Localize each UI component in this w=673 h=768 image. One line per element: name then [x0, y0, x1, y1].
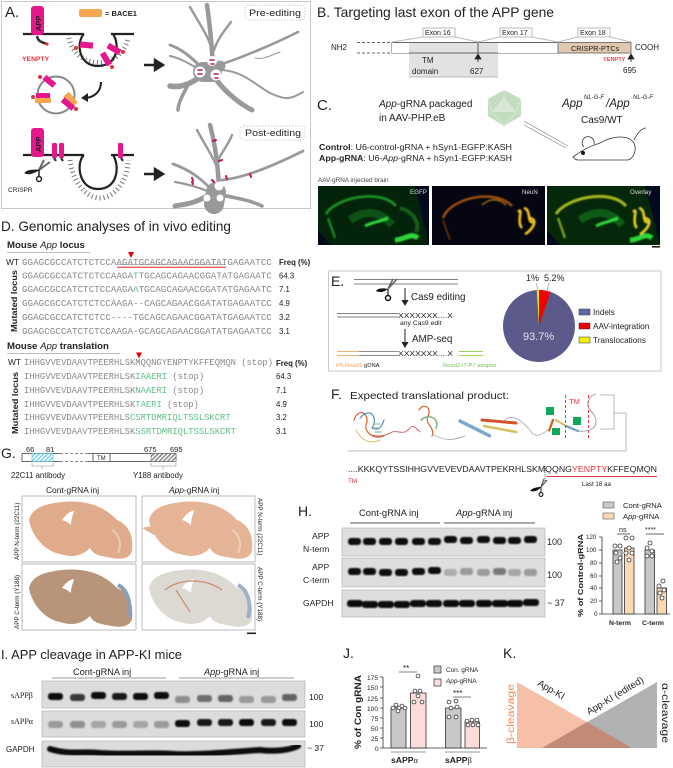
- blot headings: [350, 507, 535, 523]
- APP cylinder bottom with truncated APP: APP: [34, 137, 43, 152]
- legend J: App-gRNA: [445, 678, 477, 685]
- curved arrow: [81, 82, 101, 102]
- mutated translation rows: 4.9: [276, 400, 287, 409]
- legend J: Con. gRNA: [446, 667, 479, 674]
- row labels: [14, 498, 263, 629]
- row labels: APP C-term (Y188): [14, 575, 21, 629]
- blot row labels: ~ 37: [547, 598, 565, 608]
- gene bar labels: YENPTY: [603, 57, 626, 63]
- mutated locus rows: Mutated locus: [10, 269, 19, 332]
- scale bar: [652, 246, 660, 248]
- gene bar labels: CRISPR-PTCs: [571, 44, 620, 53]
- title F: F.: [331, 386, 342, 402]
- blot: GAPDH I: [42, 741, 305, 767]
- title D: D. Genomic analyses of in vivo editing: [1, 218, 231, 234]
- TM region: TM: [569, 397, 580, 406]
- blot headings: Cont-gRNA inj: [359, 507, 418, 518]
- row labels I: sAPPβ: [11, 691, 33, 700]
- mutated locus rows: 3.1: [279, 327, 290, 336]
- mutated locus rows: 64.3: [279, 272, 294, 280]
- icon: scissors cut site: [530, 466, 547, 496]
- gene bar labels: domain: [412, 67, 438, 76]
- workflow diagram: P5-Read1-gDNA: [336, 363, 380, 369]
- panel E: AMP-seq and pie: [328, 271, 661, 371]
- significance J: **: [403, 664, 409, 673]
- axis H: 120: [586, 534, 597, 541]
- panel C: experimental design: [317, 90, 660, 248]
- APP schematic: Y188 antibody: [133, 471, 183, 480]
- image: EGFP brain: EGFP: [410, 189, 427, 196]
- mutated translation rows: [11, 371, 291, 437]
- label: post-editing: Post-editing: [245, 128, 301, 138]
- pie chart: 1%: [526, 273, 539, 283]
- x labels J: [391, 752, 480, 765]
- axis J: [353, 674, 487, 753]
- WT translation row: Freq (%): [276, 359, 308, 368]
- pie legend: AAV-integration: [593, 322, 650, 331]
- genotype: NL-G-F: [633, 95, 653, 101]
- pie legend: Indels: [593, 308, 615, 317]
- mutated translation rows: IHHGVVEVDAAVTPEERHLSKSSRTDMRIQLTSSLSKCRT: [24, 427, 236, 437]
- APP molecules in pit: [74, 41, 125, 69]
- exon labels: Exon 18: [580, 30, 606, 37]
- pie legend: Translocations: [593, 336, 646, 345]
- mutated locus rows: [10, 269, 294, 337]
- gene bar labels: 627: [470, 67, 484, 76]
- axis H: [576, 533, 670, 618]
- image: EGFP brain: [318, 186, 429, 245]
- icon: mouse: [573, 128, 646, 160]
- pie chart: [503, 273, 575, 362]
- label E: E.: [331, 273, 344, 289]
- WT locus row: Freq (%): [279, 258, 311, 267]
- exon labels: Exon 17: [502, 30, 528, 37]
- blot row labels: C-term: [303, 575, 329, 585]
- image: NeuN brain: [432, 186, 545, 245]
- pie chart: 5.2%: [544, 273, 565, 283]
- label H: H.: [298, 503, 312, 519]
- mutated locus rows: 4.9: [279, 299, 290, 308]
- gene bar labels: COOH: [635, 43, 659, 52]
- axis J: 100: [367, 706, 378, 713]
- gene bar labels: TM: [422, 56, 434, 65]
- genotype: /App: [605, 98, 630, 110]
- workflow diagram: Cas9 editing: [411, 292, 465, 303]
- mutated translation rows: IHHGVVEVDAAVTPEERHLSCSRTDMRIQLTSSLSKCRT: [24, 413, 231, 423]
- bars H: [613, 548, 666, 614]
- panel H: western blot and bar chart: [298, 501, 670, 627]
- x labels J: sAPPβ: [445, 755, 472, 765]
- APP schematic: 695: [170, 445, 183, 454]
- label: pre-editing: Pre-editing: [249, 8, 301, 18]
- bar chart H: [576, 501, 670, 627]
- histology: App N-term: [142, 496, 255, 562]
- data points J: [391, 674, 480, 727]
- label J: J.: [343, 645, 354, 661]
- genotype: App: [561, 98, 583, 110]
- mutated translation rows: 3.1: [276, 427, 287, 436]
- label: CRISPR: CRISPR: [8, 187, 33, 194]
- gene bar labels: [331, 43, 659, 76]
- row labels: APP N-term (22C11): [256, 498, 263, 556]
- membrane with pit top: [23, 34, 134, 66]
- mutated translation rows: Mutated locus: [11, 371, 20, 434]
- mutated translation rows: 3.2: [276, 413, 287, 422]
- legend H: Cont-gRNA: [623, 501, 663, 510]
- AAV text: [378, 99, 472, 124]
- APP cylinder top: APP: [34, 16, 43, 31]
- amino acid sequence: TM: [348, 478, 357, 485]
- histology: control N-term: [22, 496, 136, 562]
- mutated locus rows: GGAGCGCCATCTCTCC----TGCAGCAGAACGGATATGAGAATCC: [22, 312, 272, 323]
- axis J: 125: [367, 696, 378, 703]
- label G: G.: [1, 445, 16, 461]
- significance J: ***: [453, 689, 462, 698]
- mutated translation rows: IHHGVVEVDAAVTPEERHLSKTAERI (stop): [24, 400, 199, 410]
- axis H: 0: [594, 611, 598, 618]
- axis J: 50: [371, 726, 379, 733]
- row labels I: sAPPα: [11, 717, 34, 726]
- histology: control C-term: [22, 564, 136, 630]
- row labels I: [6, 691, 324, 754]
- x labels J: sAPPα: [391, 755, 418, 765]
- significance H: ns: [619, 525, 627, 534]
- column headings: App-gRNA inj: [168, 485, 219, 495]
- mutated translation rows: 64.3: [276, 372, 291, 381]
- row labels: APP C-term (Y188): [256, 567, 263, 621]
- blot: sAPPalpha: [42, 711, 305, 737]
- construct text: App-gRNA : U6- App-gRNA + hSyn1-EGFP:KASH: [319, 154, 512, 163]
- workflow diagram: [336, 279, 497, 369]
- WT locus row: WT: [6, 257, 19, 267]
- clathrin coat top: [69, 38, 128, 63]
- label: post-editing: [240, 126, 305, 140]
- mutated locus rows: GGAGCGCCATCTCTCCAAGATTGCAGCAGAACGGATATGAGAATC: [22, 270, 272, 282]
- genotype: NL-G-F: [584, 95, 604, 101]
- mutated locus rows: 7.1: [279, 285, 290, 294]
- APP schematic: [11, 445, 183, 480]
- heading: translation: Mouse App translation: [7, 341, 109, 352]
- blot row labels: GAPDH: [303, 598, 334, 608]
- panel D: genomic analyses: [1, 218, 311, 437]
- blot row labels: [303, 531, 565, 608]
- row labels I: ~ 37: [307, 743, 324, 753]
- WT locus row: GGAGCGCCATCTCTCCAAGATGCAGCAGAACGGATATGAGAATCC: [22, 257, 272, 268]
- APP schematic: 81: [46, 445, 54, 454]
- APP schematic: 675: [144, 445, 157, 454]
- label: pre-editing: [245, 5, 305, 20]
- secretase tags: [546, 407, 581, 435]
- axis H: 80: [590, 560, 597, 567]
- icon: AAV capsid: [488, 90, 521, 126]
- image: overlay brain: [547, 186, 660, 245]
- arrow bottom: [144, 169, 163, 179]
- mutated locus rows: GGAGCGCCATCTCTCCAAGA--CAGCAGAACGGATATGAGAATCC: [22, 298, 272, 309]
- axis H: 20: [590, 598, 597, 605]
- APP cylinder top: [31, 6, 49, 46]
- blot headings I: [52, 667, 294, 678]
- genotype: [561, 95, 653, 126]
- blot: N-term: [342, 528, 545, 556]
- arrow top: [144, 60, 163, 70]
- mutated translation rows: 7.1: [276, 386, 287, 395]
- x labels H: C-term: [642, 620, 664, 627]
- blot: C-term: [342, 558, 545, 587]
- image: NeuN brain: NeuN: [522, 189, 538, 196]
- column headings: [46, 485, 219, 495]
- label C: C.: [317, 97, 332, 114]
- blot row labels: APP: [312, 562, 329, 572]
- cut marker translation: [136, 352, 142, 358]
- panel J: bar chart: [343, 645, 487, 765]
- axis H: 60: [590, 573, 597, 580]
- caption: AAV-gRNA injected brain: [318, 177, 389, 184]
- triangle: alpha: [542, 682, 657, 748]
- construct text: Control : U6-control-gRNA + hSyn1-EGFP:KASH: [319, 143, 512, 152]
- workflow diagram: XXXXXXX....X: [398, 311, 453, 320]
- bars J: [391, 693, 480, 748]
- label beta cleavage: β-cleavage: [506, 684, 517, 744]
- workflow diagram: AMP-seq: [412, 334, 452, 345]
- panel A: APP endocytosis and editing: [2, 2, 310, 208]
- bracket lines: [348, 395, 626, 451]
- legend H: [603, 501, 663, 521]
- axis J: 75: [371, 716, 379, 723]
- vesicle with APP and BACE1: [31, 75, 78, 114]
- blot headings: App-gRNA inj: [455, 507, 512, 518]
- blot row labels: 100: [547, 570, 562, 580]
- blot row labels: N-term: [303, 544, 329, 554]
- axis J: 150: [367, 685, 378, 692]
- blot row labels: 100: [547, 537, 562, 547]
- pie chart: 93.7%: [523, 331, 554, 343]
- subtitle F: Expected translational product:: [350, 391, 509, 402]
- clathrin coat bottom: [70, 160, 128, 198]
- workflow diagram: XXXXXXX....X: [398, 349, 453, 358]
- label App-KI edited: App-KI (edited): [585, 675, 646, 718]
- protein structure ribbons: [354, 406, 578, 442]
- exon connectors: [392, 37, 631, 77]
- gene bar labels: NH2: [331, 43, 348, 52]
- mutated locus rows: GGAGCGCCATCTCTCCAAGAATGCAGCAGAACGGATATGAGAATC: [22, 284, 272, 295]
- row labels I: GAPDH: [6, 745, 35, 754]
- significance H: ****: [645, 527, 656, 534]
- histology: App C-term: [142, 564, 255, 630]
- mutated locus rows: 3.2: [279, 313, 290, 322]
- x labels H: N-term: [609, 620, 631, 627]
- x labels H: [609, 620, 664, 627]
- mutated locus rows: GGAGCGCCATCTCTCCAAGA-GCAGCAGAACGGATATGAGAATCC: [22, 326, 272, 337]
- label App-KI: App-KI: [536, 678, 566, 702]
- significance H: [617, 525, 664, 534]
- triangle: beta: [517, 682, 632, 748]
- image: overlay brain: Overlay: [630, 189, 652, 196]
- APP cylinder bottom with truncated APP: [31, 128, 123, 161]
- neuron pre-editing: [170, 5, 303, 110]
- membrane with pit bottom: [23, 155, 134, 189]
- triangle overlap: [542, 722, 632, 748]
- amino acid sequence: ....KKKQYTSSIHHGVVEVEVDAAVTPEKRHLSKMQQNG YENPTYKFFEQMQN: [348, 464, 657, 474]
- amino acid sequence: [348, 464, 657, 488]
- legend H: App-gRNA: [623, 512, 660, 521]
- workflow diagram: any Cas9 edit: [400, 320, 442, 327]
- exon labels: [423, 28, 610, 37]
- axis H: % of Control-gRNA: [576, 533, 585, 617]
- WT translation row: IHHGVVEVDAAVTPEERHLSKMQQNGYENPTYKFFEQMQN (stop): [24, 358, 273, 368]
- column headings: Cont-gRNA inj: [46, 485, 99, 495]
- BACE1 legend: [79, 9, 137, 18]
- neuron post-editing: [173, 125, 303, 206]
- TM region: [566, 394, 596, 440]
- APP schematic: 66: [26, 445, 34, 454]
- data points H: [613, 536, 666, 600]
- APP schematic: TM: [97, 456, 106, 462]
- cut marker locus: [128, 252, 134, 258]
- panel I: APP cleavage: [1, 647, 324, 767]
- legend J: [434, 666, 479, 686]
- label alpha cleavage: α-cleavage: [659, 683, 670, 743]
- panel A label: A.: [5, 4, 19, 21]
- blot row labels: APP: [312, 531, 329, 541]
- BACE1 legend: = BACE1: [105, 9, 137, 18]
- blot: sAPPbeta: [42, 681, 305, 708]
- axis J: 25: [371, 736, 379, 743]
- amino acid sequence: Last 18 aa: [582, 481, 611, 488]
- axis J: 175: [367, 675, 378, 682]
- title I: I. APP cleavage in APP-KI mice: [1, 647, 182, 662]
- APP schematic: 22C11 antibody: [11, 471, 65, 480]
- axis J: % of Con gRNA: [353, 674, 363, 749]
- TM domain shade: [409, 42, 498, 77]
- panel F: translational product: [331, 386, 657, 496]
- icon: scissors: [25, 160, 50, 182]
- axis J: 0: [375, 746, 379, 753]
- mutated translation rows: IHHGVVEVDAAVTPEERHLSKIAAERI (stop): [24, 372, 204, 382]
- injection needle: [524, 121, 568, 148]
- pie legend: [579, 308, 650, 345]
- YENPTY label: YENPTY: [22, 56, 50, 63]
- blot: GAPDH: [342, 590, 545, 617]
- exon labels: Exon 16: [425, 30, 451, 37]
- AAV text: in AAV-PHP.eB: [379, 113, 446, 124]
- panel K: cleavage triangles: [503, 645, 670, 748]
- scale bar: [247, 632, 256, 634]
- axis H: 40: [590, 585, 597, 592]
- workflow diagram: Read2-i7-P7 adapter: [443, 363, 497, 369]
- significance J: [399, 664, 471, 698]
- gene bar labels: 695: [623, 66, 637, 75]
- heading: locus: Mouse App locus: [7, 240, 85, 251]
- blot headings I: Cont-gRNA inj: [73, 667, 131, 677]
- genotype: Cas9/WT: [581, 115, 623, 126]
- axis H: 100: [586, 547, 597, 554]
- gene bar: [357, 42, 631, 53]
- panel B: exon map: [317, 4, 659, 77]
- mutated translation rows: IHHGVVEVDAAVTPEERHLSKNAAERI (stop): [24, 386, 204, 396]
- panel G: antibodies and histology: [1, 445, 263, 634]
- row labels I: 100: [309, 719, 324, 729]
- row labels: APP N-term (22C11): [14, 502, 21, 560]
- row labels I: 100: [309, 692, 324, 702]
- WT translation row: WT: [8, 357, 21, 367]
- blot headings I: App-gRNA inj: [203, 667, 259, 677]
- title B: B. Targeting last exon of the APP gene: [317, 4, 554, 20]
- construct text: [319, 143, 512, 163]
- AAV text: App-gRNA packaged: [378, 99, 472, 110]
- label K: K.: [503, 645, 516, 661]
